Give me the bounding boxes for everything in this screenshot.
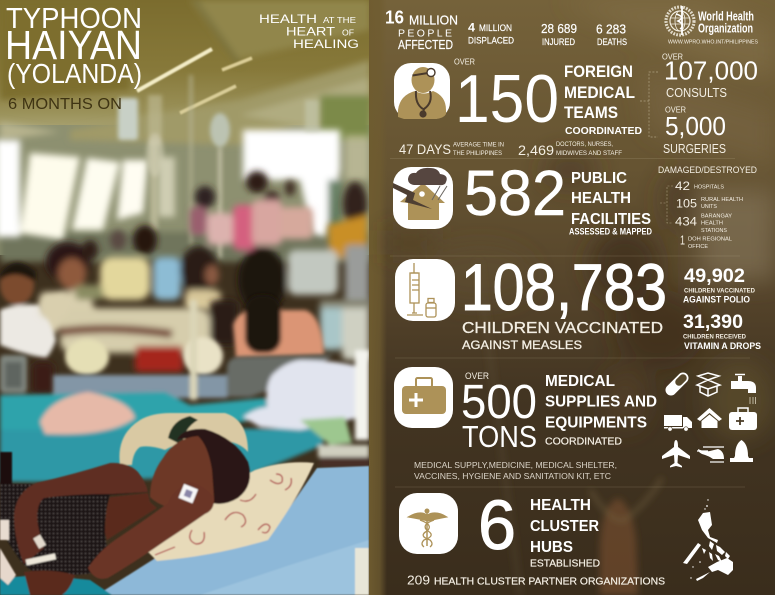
stat: 47 days: AVERAGE TIME IN bbox=[453, 142, 504, 148]
stat: displaced: 4 bbox=[468, 20, 475, 34]
stat: 150 foreign medical teams: COORDINATED bbox=[565, 125, 642, 137]
icon: helicopter bbox=[697, 447, 724, 462]
icon: medical kit bbox=[394, 367, 453, 428]
heading: medical supplies: EQUIPMENTS bbox=[545, 414, 647, 432]
chair back bbox=[119, 413, 248, 465]
tagline: HEALTH bbox=[259, 12, 317, 26]
bracket: teams to consults bbox=[640, 72, 658, 137]
text: supply types bbox=[414, 460, 617, 481]
stat: 500 tons: OVER bbox=[465, 371, 489, 382]
icon: box bbox=[697, 373, 720, 396]
subtitle: 6 MONTHS ON bbox=[8, 96, 122, 113]
stat: 108,783 children vaccinated bbox=[461, 250, 667, 352]
list: damaged or destroyed facilities: 434 bbox=[675, 214, 697, 228]
beds and chairs bbox=[0, 300, 369, 482]
stat: polio vaccination: AGAINST POLIO bbox=[683, 294, 750, 306]
stat: 500 tons: 500 bbox=[461, 376, 537, 429]
stat: 150 foreign medical teams: MEDICAL bbox=[564, 84, 635, 102]
stat: 2,469 staff bbox=[518, 142, 622, 158]
text: supply types: MEDICAL SUPPLY,MEDICINE, MEDICAL SHELTER, bbox=[414, 460, 617, 470]
icon: WHO emblem and name: WWW.WPRO.WHO.INT/PHILIPPINES bbox=[668, 40, 758, 46]
stat: surgeries bbox=[663, 104, 726, 156]
list: damaged or destroyed facilities: 1 bbox=[680, 232, 685, 248]
pillow bbox=[148, 462, 314, 561]
stat: consults bbox=[662, 52, 758, 100]
stat: injured bbox=[541, 21, 577, 47]
stat: 582 public health facilities: FACILITIES bbox=[571, 211, 651, 228]
heading: medical supplies bbox=[545, 373, 657, 448]
icon: tap bbox=[731, 374, 756, 404]
list: damaged or destroyed facilities: STATIONS bbox=[701, 228, 727, 234]
stat: injured: INJURED bbox=[542, 37, 575, 47]
tagline: AT THE bbox=[323, 15, 356, 25]
stat: 582 public health facilities bbox=[464, 157, 652, 236]
stat: consults: OVER bbox=[662, 52, 683, 62]
list: damaged or destroyed facilities: OFFICE bbox=[688, 244, 708, 250]
stat: 47 days: THE PHILIPPINES bbox=[453, 151, 502, 157]
stat: deaths bbox=[596, 22, 627, 47]
icon: WHO emblem and name bbox=[666, 6, 758, 46]
stat: 6 health cluster hubs bbox=[478, 486, 600, 570]
icon: WHO emblem and name: Organization bbox=[698, 22, 753, 36]
stat: consults: 107,000 bbox=[664, 56, 758, 86]
stat: people affected bbox=[385, 8, 458, 52]
stat: injured: 28 689 bbox=[541, 21, 577, 36]
bracket: damaged list bbox=[660, 186, 673, 223]
stat: 150 foreign medical teams: OVER bbox=[454, 56, 475, 66]
icon: pill bbox=[671, 378, 683, 390]
stat: 6 health cluster hubs: HEALTH bbox=[530, 497, 591, 514]
title: (YOLANDA) bbox=[7, 58, 142, 89]
title bbox=[5, 3, 142, 89]
icon: truck bbox=[664, 415, 692, 431]
title: TYPHOON bbox=[6, 3, 142, 35]
text: partner organizations bbox=[407, 572, 665, 588]
stat: polio vaccination bbox=[683, 266, 756, 306]
stat: 582 public health facilities: 582 bbox=[464, 157, 566, 229]
stat: displaced bbox=[468, 20, 514, 46]
icon: shelter bbox=[697, 408, 722, 428]
heading: medical supplies: COORDINATED bbox=[545, 436, 622, 448]
stat: 108,783 children vaccinated: AGAINST MEASLES bbox=[462, 338, 582, 352]
stat: 108,783 children vaccinated: 108,783 bbox=[461, 250, 667, 324]
stat: 150 foreign medical teams: 150 bbox=[455, 61, 559, 137]
list: damaged or destroyed facilities: 105 bbox=[676, 196, 697, 210]
map: Philippines bbox=[683, 499, 733, 581]
stat: 582 public health facilities: HEALTH bbox=[571, 190, 631, 207]
stat: 500 tons: TONS bbox=[462, 419, 537, 454]
tagline: HEART bbox=[286, 24, 336, 38]
heading: medical supplies: SUPPLIES AND bbox=[545, 394, 657, 410]
panel background: darkened photo bbox=[369, 0, 775, 595]
crowd bbox=[40, 171, 369, 340]
list: damaged or destroyed facilities: HEALTH bbox=[701, 220, 723, 226]
dress bbox=[0, 484, 110, 575]
list: damaged or destroyed facilities: BARANGAY bbox=[701, 214, 732, 220]
stat: displaced: DISPLACED bbox=[468, 36, 514, 46]
stat: people affected: MILLION bbox=[409, 14, 458, 28]
face and arms bbox=[105, 493, 157, 540]
icon: doctor bbox=[394, 63, 450, 119]
list: damaged or destroyed facilities: DOH REGIONAL bbox=[688, 236, 733, 242]
hair bbox=[177, 429, 250, 504]
list: damaged or destroyed facilities: 42 bbox=[675, 179, 690, 193]
icon: caduceus bbox=[399, 493, 458, 554]
stat: vitamin A bbox=[683, 312, 761, 352]
IV drips bbox=[118, 75, 319, 258]
text: partner organizations: 209 bbox=[407, 572, 430, 588]
tagline: HEALING bbox=[293, 37, 359, 51]
list: damaged or destroyed facilities: DAMAGED/DESTROYED bbox=[658, 165, 757, 176]
stat: 108,783 children vaccinated: CHILDREN VACCINATED bbox=[462, 320, 663, 337]
stat: 2,469 staff: MIDWIVES AND STAFF bbox=[556, 151, 622, 157]
stat: displaced: MILLION bbox=[479, 23, 512, 34]
text: partner organizations: HEALTH CLUSTER PARTNER ORGANIZATIONS bbox=[434, 576, 665, 588]
stat: 47 days bbox=[399, 141, 504, 157]
stat: 150 foreign medical teams: TEAMS bbox=[564, 104, 618, 122]
stat: 500 tons bbox=[461, 371, 537, 454]
bed bbox=[97, 466, 369, 595]
stat: 2,469 staff: DOCTORS, NURSES, bbox=[556, 142, 613, 148]
stat: 47 days: 47 DAYS bbox=[399, 141, 451, 157]
title: HAIYAN bbox=[5, 22, 142, 68]
sticker bbox=[179, 484, 198, 503]
icon grid: supplies and transport bbox=[662, 373, 757, 468]
photo: field hospital tent interior bbox=[0, 0, 370, 595]
stat: vitamin A: CHILDREN RECEIVED bbox=[683, 334, 747, 340]
icon: syringe and vial bbox=[395, 259, 455, 321]
stat: 582 public health facilities: ASSESSED & MAPPED bbox=[569, 226, 652, 236]
tagline bbox=[259, 12, 359, 51]
stat: surgeries: SURGERIES bbox=[663, 141, 726, 156]
stat: consults: CONSULTS bbox=[666, 86, 727, 100]
stat: polio vaccination: 49,902 bbox=[684, 266, 745, 287]
stat: surgeries: 5,000 bbox=[665, 111, 726, 141]
icon: ship bbox=[730, 440, 753, 462]
stat: 6 health cluster hubs: HUBS bbox=[530, 539, 573, 556]
icon: storm damaged facility bbox=[393, 167, 453, 229]
list: damaged or destroyed facilities: HOSPITALS bbox=[694, 184, 724, 190]
stat: 150 foreign medical teams: FOREIGN bbox=[564, 63, 633, 81]
stat: 6 health cluster hubs: 6 bbox=[478, 486, 516, 564]
stat: 2,469 staff: 2,469 bbox=[518, 142, 554, 158]
icon: first aid kit bbox=[729, 408, 757, 430]
text: supply types: VACCINES, HYGIENE AND SANITATION KIT, ETC bbox=[414, 471, 611, 481]
stat: people affected: 16 bbox=[385, 8, 404, 28]
list: damaged or destroyed facilities: UNITS bbox=[701, 204, 717, 210]
stat: 6 health cluster hubs: CLUSTER bbox=[530, 518, 599, 535]
stat: people affected: AFFECTED bbox=[398, 38, 453, 52]
icon: plane bbox=[662, 440, 690, 468]
icon: WHO emblem and name: World Health bbox=[698, 10, 754, 24]
stat: polio vaccination: CHILDREN VACCINATED bbox=[684, 288, 756, 294]
stat: 150 foreign medical teams bbox=[454, 56, 642, 137]
stat: 582 public health facilities: PUBLIC bbox=[571, 170, 627, 187]
stat: vitamin A: VITAMIN A DROPS bbox=[684, 341, 761, 352]
stat: deaths: DEATHS bbox=[597, 37, 627, 47]
stat: 6 health cluster hubs: ESTABLISHED bbox=[530, 558, 600, 570]
stat: vitamin A: 31,390 bbox=[683, 312, 743, 333]
stat: surgeries: OVER bbox=[665, 104, 686, 114]
list: damaged or destroyed facilities bbox=[658, 165, 757, 250]
heading: medical supplies: MEDICAL bbox=[545, 373, 615, 390]
stat: people affected: PEOPLE bbox=[398, 28, 452, 40]
tagline: OF bbox=[342, 28, 354, 38]
list: damaged or destroyed facilities: RURAL HEALTH bbox=[701, 197, 743, 203]
stat: deaths: 6 283 bbox=[596, 22, 626, 36]
